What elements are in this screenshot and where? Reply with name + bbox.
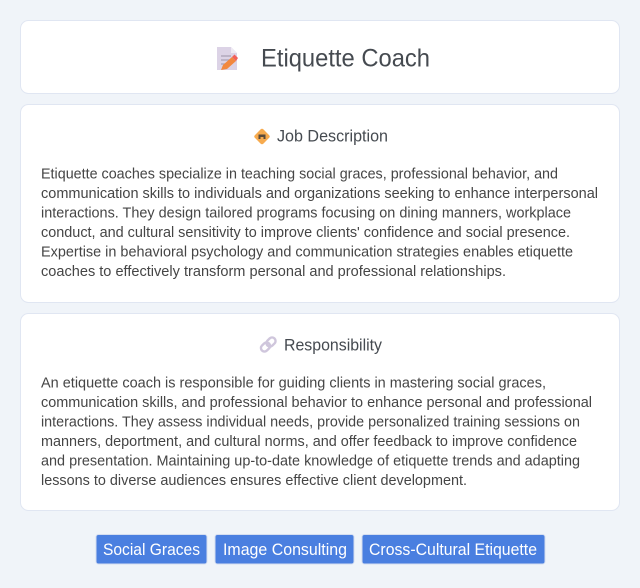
job description text — [41, 166, 598, 280]
responsibility text: manners, deportment, and cultural norms, and offer feedback to improve confidence — [41, 434, 577, 450]
job description text: Expertise in behavioral psychology and communication strategies enables etiquette — [41, 244, 573, 260]
tag: social graces: Social Graces — [103, 541, 200, 559]
tag: social graces — [96, 534, 207, 564]
tag: cross-cultural etiquette — [362, 534, 545, 564]
tag: image consulting: Image Consulting — [223, 541, 347, 559]
responsibility text: interactions. They assess individual needs, provide personalized training sessions on — [41, 414, 580, 430]
responsibility text — [41, 376, 592, 489]
responsibility heading: Responsibility — [284, 336, 383, 354]
responsibility text: communication skills, and professional behavior to enhance personal and professional — [41, 395, 592, 411]
job description heading: Job Description — [277, 128, 388, 146]
panel: job description — [20, 104, 620, 302]
icon: chain link — [259, 336, 277, 353]
panel: title — [20, 20, 620, 94]
job description text: conduct, and cultural sensitivity to improve clients' confidence and social presence. — [41, 225, 570, 241]
tag: cross-cultural etiquette: Cross-Cultural Etiquette — [369, 541, 537, 559]
responsibility text: lessons to diverse audiences ensures effective client development. — [41, 473, 467, 489]
job description text: communication skills to individuals and organizations seeking to enhance interpersonal — [41, 186, 598, 202]
job description text: Etiquette coaches specialize in teaching social graces, professional behavior, and — [41, 166, 558, 182]
job description text: interactions. They design tailored programs focusing on dining manners, workplace — [41, 206, 571, 222]
title text: Etiquette Coach — [261, 44, 430, 72]
responsibility text: and presentation. Maintaining up-to-date knowledge of etiquette trends and adapting — [41, 454, 580, 470]
panel: responsibility — [20, 314, 620, 510]
job description text: coaches to effectively transform personal and professional relationships. — [41, 264, 506, 280]
icon: document with pencil — [217, 47, 238, 70]
tag: image consulting — [215, 534, 354, 564]
responsibility text: An etiquette coach is responsible for guiding clients in mastering social graces, — [41, 376, 546, 392]
icon: job description diamond — [254, 128, 270, 145]
